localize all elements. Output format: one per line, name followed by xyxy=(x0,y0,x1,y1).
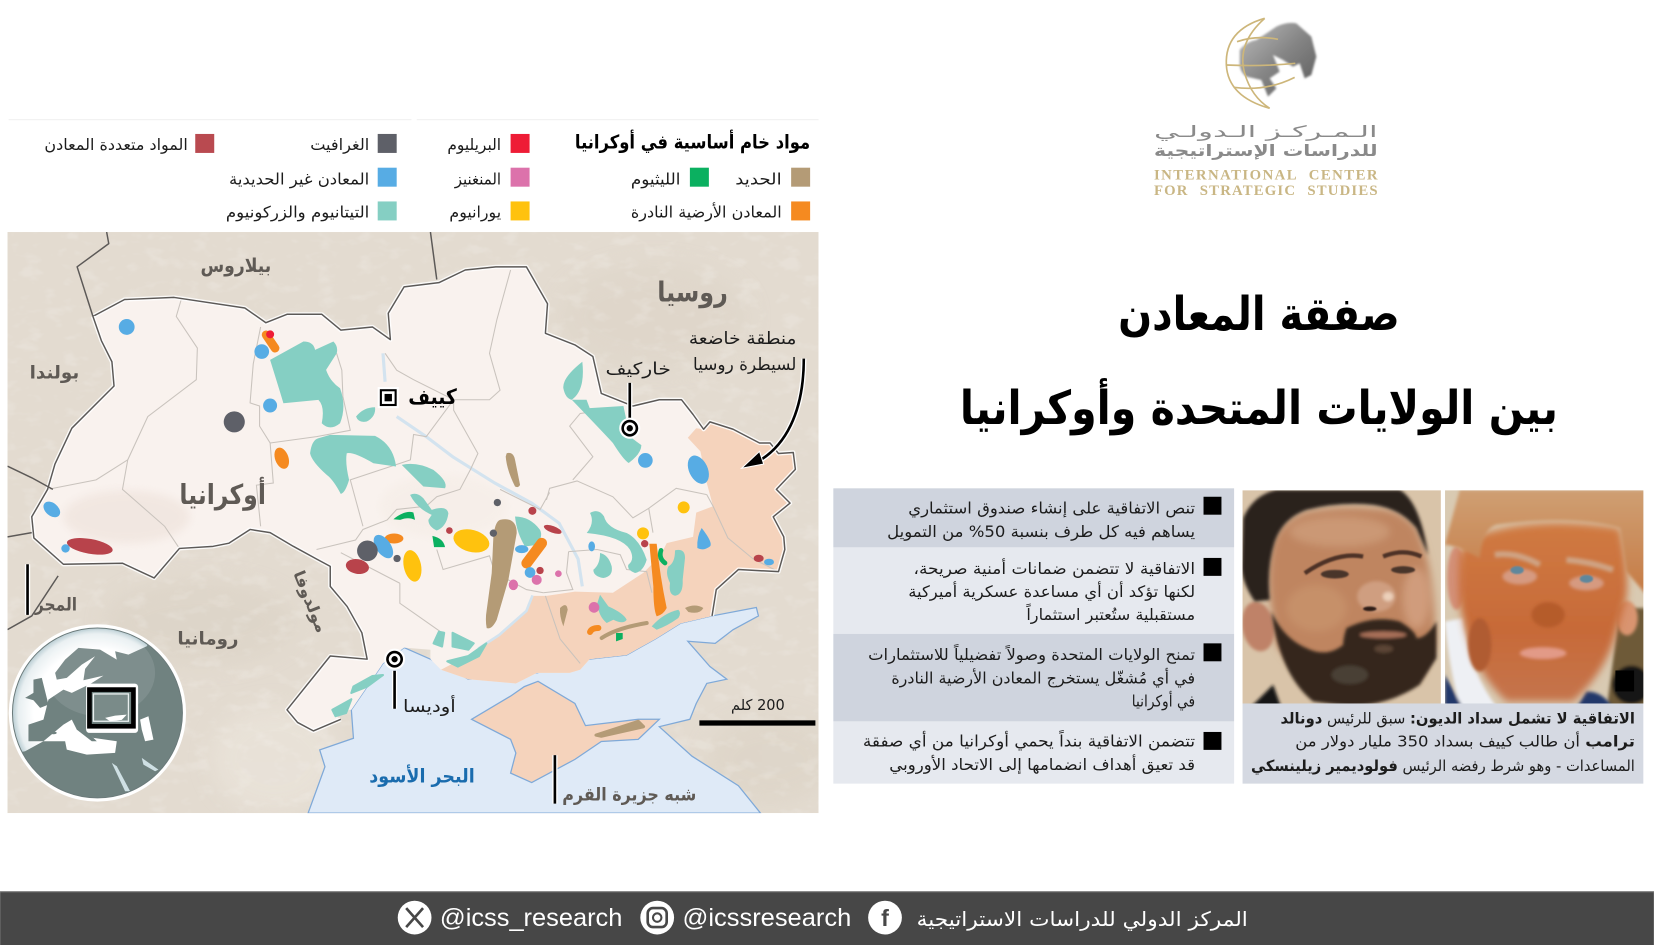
legend: iron xyxy=(735,168,810,189)
legend: graphite xyxy=(310,134,397,155)
icon: facebook: f xyxy=(881,905,889,931)
highlight on sphere xyxy=(54,648,155,714)
deposits: titanium and zirconium xyxy=(270,342,685,716)
legend: manganese xyxy=(454,168,530,190)
title: صفقة المعادن xyxy=(1118,287,1400,341)
logo Arabic name: للدراسات الإستراتيجية xyxy=(1154,141,1378,160)
city labels: كييف xyxy=(408,384,457,409)
legend: non-ferrous metals: المعادن غير الحديدية xyxy=(229,170,369,190)
panel: key points xyxy=(833,488,1234,784)
bullet 3: تمنح الولايات المتحدة وصولاً تفضيلياً للاستثمارات xyxy=(868,643,1195,665)
deposits: polymetallic ores xyxy=(66,507,764,576)
icon: facebook xyxy=(868,901,902,934)
Ukraine territory xyxy=(34,269,712,728)
legend heading: مواد خام أساسية في أوكرانيا xyxy=(575,130,810,154)
city labels: منطقة خاضعة xyxy=(689,328,796,348)
deposits: uranium xyxy=(401,501,690,583)
country labels: شبه جزيرة القرم xyxy=(562,785,696,806)
legend: lithium: الليثيوم xyxy=(631,170,680,190)
logo English name: INTERNATIONAL CENTER xyxy=(1154,167,1378,183)
legend: uranium xyxy=(449,201,530,222)
icon: globe xyxy=(1226,18,1316,108)
scale bar xyxy=(699,697,815,726)
country labels: بيلاروس xyxy=(201,255,271,277)
logo Arabic name xyxy=(1154,122,1378,160)
marker: Odesa xyxy=(384,649,405,709)
legend: beryllium xyxy=(447,134,530,155)
bullet 4: قد تعيق أهداف انضمامها إلى الاتحاد الأوروبي xyxy=(889,754,1195,775)
locator square xyxy=(86,684,138,733)
photo: Zelensky xyxy=(1242,490,1441,704)
footer: instagram handle: @icssresearch xyxy=(683,904,851,932)
panel: caption: الاتفاقية لا تشمل سداد الديون: سبق للرئيس دونالد xyxy=(1281,710,1635,728)
panel: map legend xyxy=(9,119,819,222)
city labels: خاركيف xyxy=(606,358,671,378)
British Isles xyxy=(25,678,48,708)
title xyxy=(960,287,1558,436)
country labels xyxy=(30,255,728,806)
bullet 2: لكنها تؤكد أن أي مساعدة عسكرية أميركية xyxy=(908,581,1195,602)
marker: Kyiv xyxy=(378,387,399,408)
footer bar xyxy=(0,891,1654,945)
inset globe locator xyxy=(8,624,186,802)
bullet 4 xyxy=(863,729,1221,775)
deposits: lithium xyxy=(393,512,665,641)
legend: graphite: الغرافيت xyxy=(310,135,369,155)
bullet 1 xyxy=(887,497,1221,542)
panel: caption: المساعدات - وهو شرط رفضه الرئيس فولوديمير زيلينسكي xyxy=(1251,757,1635,776)
logo English name xyxy=(1154,167,1378,199)
country labels: رومانيا xyxy=(177,628,238,649)
country labels: مولدوفا xyxy=(289,568,331,635)
city labels: لسيطرة روسيا xyxy=(693,354,796,374)
bullet 3: في أي مُشغّل يستخرج المعادن الأرضية النادرة xyxy=(891,667,1195,688)
deposits: graphite xyxy=(224,411,501,562)
bullet 1: يساهم فيه كل طرف بنسبة 50% من التمويل xyxy=(887,522,1195,542)
city labels xyxy=(403,328,796,716)
map of Ukraine xyxy=(0,232,833,813)
deposits: non-ferrous metals xyxy=(40,319,774,578)
legend: iron: الحديد xyxy=(735,170,782,189)
national borders xyxy=(8,232,795,731)
country labels: أوكرانيا xyxy=(179,477,266,511)
photo: Trump xyxy=(1445,490,1644,704)
bullet 1: تنص الاتفاقية على إنشاء صندوق استثماري xyxy=(908,499,1195,519)
legend: beryllium: البريليوم xyxy=(447,135,501,155)
arrow: Russian-controlled area xyxy=(742,359,804,468)
leader line: Hungary xyxy=(25,564,30,615)
country labels: بولندا xyxy=(30,363,79,384)
deposits: rare earths xyxy=(266,335,667,632)
logo: International Center for Strategic Studies xyxy=(1154,18,1378,199)
legend: uranium: يورانيوم xyxy=(449,202,501,222)
legend: non-ferrous metals xyxy=(229,168,397,190)
icon: x xyxy=(398,901,431,934)
icon: instagram xyxy=(640,901,674,934)
legend: lithium xyxy=(631,168,709,190)
logo Arabic name: الـمـركـز الـدولـي xyxy=(1154,122,1378,142)
bullet 2: مستقبلية ستُعتبر استثماراً xyxy=(1026,603,1195,625)
rivers xyxy=(383,353,582,650)
bullet 4: تتضمن الاتفاقية بنداً يحمي أوكرانيا من أي صفقة xyxy=(863,729,1195,752)
legend: rare earths: المعادن الأرضية النادرة xyxy=(631,202,782,222)
leader line: Crimea xyxy=(552,755,557,804)
oblast boundaries xyxy=(48,270,778,663)
deposits: iron xyxy=(486,453,703,736)
deposit: beryllium xyxy=(266,330,274,338)
bullet 3 xyxy=(868,643,1221,712)
legend: polymetallic ores: المواد متعددة المعادن xyxy=(44,135,188,155)
bullet 3: في أوكرانيا xyxy=(1132,691,1195,712)
sea: Atlantic and Arctic xyxy=(13,628,148,752)
deposits: manganese xyxy=(509,570,599,613)
marker: Kharkiv xyxy=(619,383,640,439)
occupied territory xyxy=(441,422,795,783)
country labels: المجر xyxy=(34,595,77,616)
panel: caption xyxy=(1243,703,1643,784)
Crimea xyxy=(472,681,659,783)
seas xyxy=(43,716,158,791)
legend: manganese: المنغنيز xyxy=(454,170,501,190)
logo English name: FOR STRATEGIC STUDIES xyxy=(1154,183,1378,199)
footer: center name: المركز الدولي للدراسات الاستراتيجية xyxy=(917,907,1248,932)
bullet 2 xyxy=(908,558,1221,625)
Black Sea xyxy=(308,608,761,813)
legend: titanium and zirconium: التيتانيوم والزركونيوم xyxy=(226,202,369,222)
country labels: البحر الأسود xyxy=(369,765,475,788)
country labels: روسيا xyxy=(657,278,728,309)
panel: caption: ترامب أن طالب كييف بسداد 350 مليار دولار من xyxy=(1295,732,1635,751)
footer: x handle: @icss_research xyxy=(440,904,622,932)
scale bar: 200 كلم xyxy=(731,697,785,714)
bullet 2: الاتفاقية لا تتضمن ضمانات أمنية صريحة، xyxy=(913,558,1195,579)
title: بين الولايات المتحدة وأوكرانيا xyxy=(960,378,1558,436)
city labels: أوديسا xyxy=(403,695,456,716)
